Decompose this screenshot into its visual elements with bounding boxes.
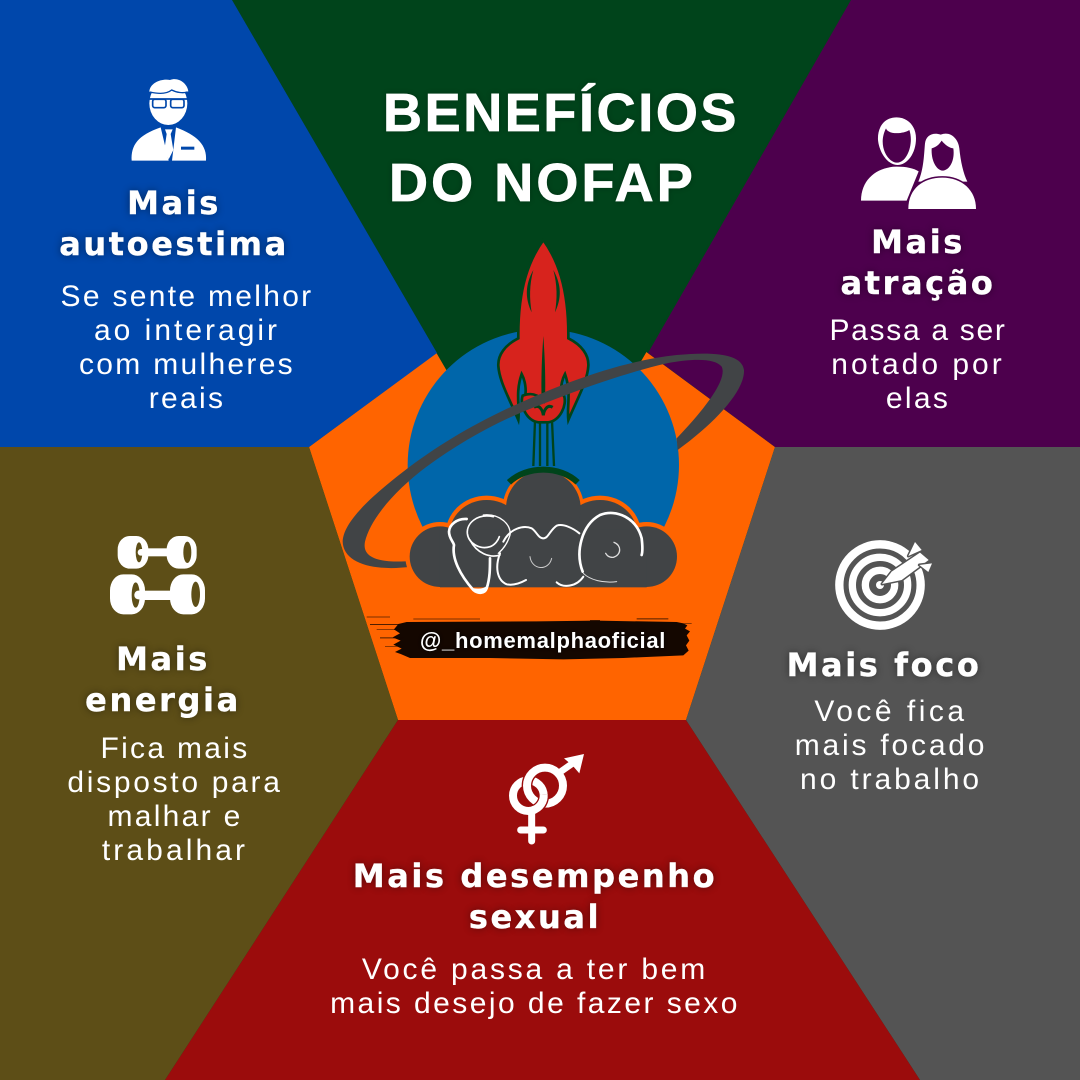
rocket exhaust lines: [533, 421, 554, 466]
heading: mais autoestima: [56, 184, 289, 263]
brush stroke banner: [367, 617, 692, 659]
heading: mais desempenho sexual: Mais desempenho: [353, 857, 717, 895]
panel: desempenho sexual: [165, 720, 920, 1080]
panel: title background: [232, 0, 851, 532]
text: autoestima description: ao interagir: [94, 314, 280, 347]
heading: mais atração: [840, 223, 996, 302]
heading: mais energia: energia: [85, 681, 241, 719]
heading: mais energia: Mais: [116, 640, 210, 678]
heading: mais desempenho sexual: sexual: [469, 898, 601, 936]
text: energia description: trabalhar: [102, 834, 248, 867]
text: desempenho description: mais desejo de fazer sexo: [330, 987, 740, 1020]
panel: autoestima: [0, 0, 437, 447]
heading: mais atração: atração: [840, 264, 996, 302]
text: atração description: notado por: [831, 348, 1005, 381]
text: desempenho description: Você passa a ter bem: [362, 953, 708, 986]
icon: couple: [861, 117, 976, 209]
text: energia description: disposto para: [67, 766, 283, 799]
heading: mais desempenho sexual: [351, 857, 717, 936]
social handle: @_homemalphaoficial: [420, 628, 666, 653]
text: desempenho description: [330, 953, 740, 1020]
text: atração description: Passa a ser: [829, 314, 1007, 347]
text: foco description: mais focado: [795, 729, 987, 762]
heading: mais energia: [84, 640, 241, 720]
title: BENEFÍCIOS: [383, 83, 739, 143]
panel: foco: [686, 447, 1080, 1080]
orbit ring: [343, 354, 744, 568]
text: energia description: Fica mais: [100, 732, 250, 765]
icon: gender symbols: [513, 754, 584, 841]
title: DO NOFAP: [389, 153, 696, 213]
text: foco description: Você fica: [814, 695, 968, 728]
rocket: [498, 240, 588, 422]
logo: rocket, planet and cloud: [343, 240, 744, 659]
text: atração description: [829, 314, 1007, 415]
text: energia description: [67, 732, 283, 867]
icon: target with dart: [839, 542, 932, 626]
panel: central pentagon: [309, 275, 775, 720]
text: autoestima description: Se sente melhor: [61, 280, 313, 313]
heading: mais autoestima: Mais: [127, 184, 221, 222]
text: autoestima description: com mulheres: [79, 348, 295, 381]
heading: mais foco: Mais foco: [787, 646, 981, 684]
icon: dumbbells: [110, 536, 205, 614]
panel: energia: [0, 447, 398, 1080]
cloud white swirl lettering: [449, 513, 642, 593]
icon: man with glasses: [132, 79, 206, 161]
heading: mais atração: Mais: [871, 223, 965, 261]
text: atração description: elas: [886, 382, 950, 415]
cloud: [405, 468, 681, 593]
planet circle: [408, 329, 679, 547]
panel: atração: [648, 0, 1080, 447]
text: foco description: [795, 695, 987, 796]
text: autoestima description: reais: [149, 382, 225, 415]
text: autoestima description: [61, 280, 313, 415]
heading: mais autoestima: autoestima: [59, 225, 289, 263]
text: energia description: malhar e: [107, 800, 243, 833]
title: [383, 82, 739, 213]
text: foco description: no trabalho: [800, 763, 982, 796]
